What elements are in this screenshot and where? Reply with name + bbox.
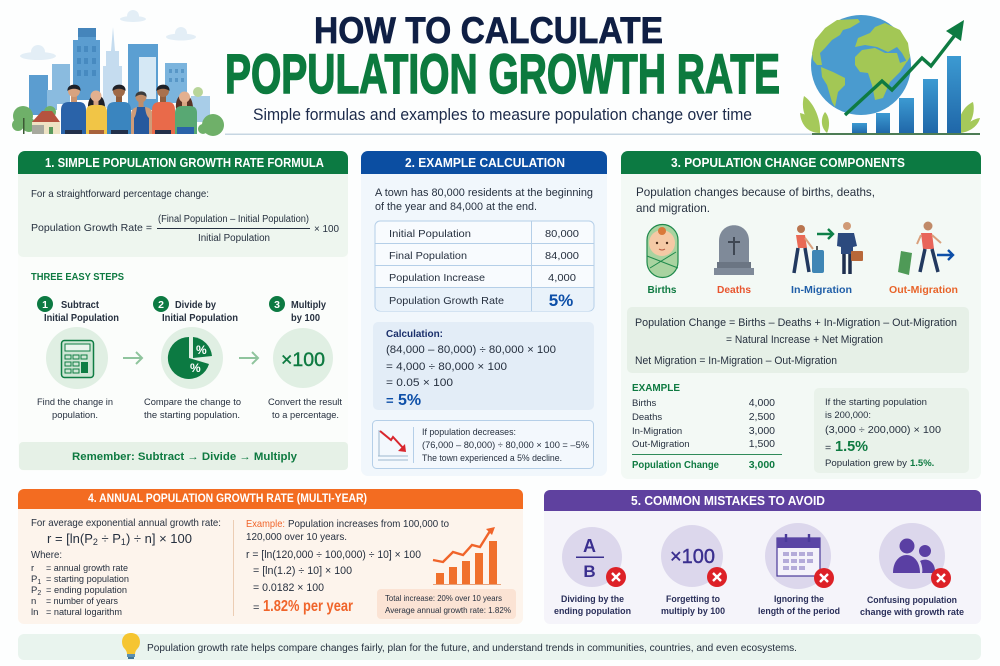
- three easy steps heading: THREE EASY STEPS: [31, 271, 124, 283]
- calculation box: [373, 322, 594, 410]
- panel 3 header: 3. POPULATION CHANGE COMPONENTS: [671, 156, 905, 170]
- annual formula and definitions: 2: [93, 537, 98, 547]
- step 1: [37, 296, 119, 421]
- panel 2 header: 2. EXAMPLE CALCULATION: [405, 155, 565, 170]
- step 2: Divide by: [175, 300, 216, 311]
- data table: 4,000: [548, 272, 576, 284]
- formula box: × 100: [314, 223, 339, 235]
- summary callout: Total increase: 20% over 10 years: [385, 593, 502, 603]
- worked example: Population increases from 100,000 to: [288, 518, 449, 530]
- step 1: Subtract: [61, 300, 100, 311]
- decline note: If population decreases:: [422, 427, 516, 437]
- mistake 1: B: [583, 562, 596, 581]
- step 2: Compare the change to: [144, 397, 241, 408]
- mistake 3: length of the period: [758, 606, 840, 617]
- example table: In-Migration: [632, 426, 682, 437]
- formula box: Population Change = Births – Deaths + In-Migration – Out-Migration: [635, 317, 957, 329]
- annual formula and definitions: = number of years: [46, 596, 118, 607]
- worked example: Example:: [246, 518, 285, 530]
- data table: Population Growth Rate: [389, 295, 504, 307]
- annual formula and definitions: Where:: [31, 549, 62, 561]
- icon: light bulb: [122, 633, 140, 659]
- worked example: = 0.0182 × 100: [253, 582, 324, 594]
- mistake 1: A: [583, 536, 596, 556]
- mistake 2: [661, 525, 727, 617]
- footer note: [18, 633, 981, 660]
- step 1: Initial Population: [44, 313, 119, 324]
- step 3: to a percentage.: [272, 410, 339, 421]
- icon: out-migration: Out-Migration: [889, 284, 958, 296]
- example table: EXAMPLE: [632, 382, 680, 394]
- calculation box: (84,000 – 80,000) ÷ 80,000 × 100: [386, 344, 556, 356]
- example table: 4,000: [749, 397, 775, 409]
- annual formula and definitions: 1: [121, 537, 126, 547]
- annual formula and definitions: r: [31, 563, 34, 574]
- step 1: Find the change in: [37, 397, 113, 408]
- step 2: Initial Population: [162, 313, 238, 324]
- result callout: Population grew by: [825, 458, 907, 469]
- data table: [375, 221, 594, 311]
- panel 1: simple formula: [18, 151, 348, 471]
- panel 2 header: [361, 151, 607, 174]
- icon: deaths: [714, 225, 754, 296]
- annual formula and definitions: = ending population: [46, 585, 127, 596]
- person 2: [86, 90, 107, 134]
- data table: 5%: [549, 291, 573, 310]
- annual formula and definitions: = natural logarithm: [46, 607, 122, 618]
- remember callout: [19, 442, 348, 470]
- mistake 1: ending population: [554, 606, 631, 617]
- title: POPULATION GROWTH RATE: [225, 42, 780, 105]
- example table: 3,000: [749, 425, 775, 437]
- step 3: Multiply: [291, 300, 326, 311]
- example table: Population Change: [632, 459, 719, 471]
- icon: out-migration: [889, 222, 958, 296]
- annual formula and definitions: ln: [31, 607, 38, 618]
- icon: calendar: [777, 534, 820, 576]
- step 1: population.: [52, 410, 98, 421]
- panel 1 header: 1. SIMPLE POPULATION GROWTH RATE FORMULA: [45, 156, 324, 170]
- example table: Deaths: [632, 412, 662, 423]
- formula box: Net Migration = In-Migration – Out-Migration: [635, 355, 837, 367]
- icon: births: [647, 224, 678, 296]
- worked example: [246, 518, 449, 615]
- panel 5: common mistakes: [544, 490, 981, 624]
- summary callout: Average annual growth rate: 1.82%: [385, 605, 511, 615]
- panel 1 header: [18, 151, 348, 174]
- result callout: is 200,000:: [825, 410, 871, 421]
- step 2: [144, 296, 241, 421]
- scenario text: of the year and 84,000 at the end.: [375, 201, 537, 213]
- formula box: (Final Population – Initial Population): [158, 214, 309, 225]
- header illustration: globe with growth bars and arrow: [800, 15, 980, 135]
- mistake 3: [758, 523, 840, 617]
- data table: Population Increase: [389, 272, 485, 284]
- mistake 4: change with growth rate: [860, 607, 964, 618]
- annual formula and definitions: r = [ln(P: [47, 531, 93, 546]
- icon: declining chart: [378, 430, 408, 460]
- mistake 1: [554, 527, 631, 617]
- calculation box: = 4,000 ÷ 80,000 × 100: [386, 361, 507, 373]
- panel 4 background: [18, 489, 523, 624]
- mistake 2: Forgetting to: [666, 594, 720, 605]
- annual formula and definitions: ) ÷ n] × 100: [126, 531, 192, 546]
- example table: 2,500: [749, 411, 775, 423]
- icon: percent pie: [168, 337, 212, 379]
- decline note: The town experienced a 5% decline.: [422, 453, 562, 463]
- mistake 2: multiply by 100: [661, 606, 725, 617]
- header illustration: city skyline and people: [12, 10, 224, 136]
- data table: 80,000: [545, 228, 579, 240]
- person 3: [107, 85, 131, 134]
- scenario text: A town has 80,000 residents at the beginning: [375, 187, 593, 199]
- formula box: [18, 170, 348, 257]
- step 2: 2: [158, 299, 164, 311]
- panel 4 header: [18, 489, 523, 509]
- panel 2: example calculation: [361, 151, 607, 476]
- annual formula and definitions: = starting population: [46, 574, 129, 585]
- result callout: 1.5%.: [910, 458, 934, 469]
- intro text: [636, 185, 875, 215]
- intro text: and migration.: [636, 201, 710, 215]
- step 3: by 100: [291, 313, 320, 324]
- icon: percent pie: %: [190, 361, 201, 375]
- formula box: Population Growth Rate =: [31, 222, 152, 234]
- example table: Births: [632, 398, 657, 409]
- icon: calculator: [62, 340, 94, 378]
- worked example: 120,000 over 10 years.: [246, 531, 347, 543]
- panel 3 background: [621, 151, 981, 479]
- annual formula and definitions: P: [31, 574, 37, 585]
- icon: times 100: ×100: [281, 350, 325, 371]
- formula box: [627, 307, 969, 373]
- icon: in-migration: [791, 222, 863, 296]
- mistake 2: ×100: [670, 546, 715, 568]
- summary callout: [377, 589, 516, 619]
- step 2: the starting population.: [144, 410, 240, 421]
- icon: percent pie: %: [196, 343, 207, 357]
- example table: 3,000: [749, 459, 775, 471]
- mistake 3: Ignoring the: [774, 594, 824, 605]
- result callout: [814, 388, 969, 473]
- icon: in-migration: In-Migration: [791, 284, 852, 296]
- arrow: step 1 to 2: [123, 352, 142, 364]
- calculation box: = 0.05 × 100: [386, 377, 453, 389]
- annual formula and definitions: ÷ P: [98, 531, 121, 546]
- panel 2 background: [361, 151, 607, 476]
- step 1: 1: [42, 299, 48, 311]
- data table: Initial Population: [389, 228, 471, 240]
- person 6: [175, 92, 197, 134]
- panel 3 header: [621, 151, 981, 174]
- person 1: [61, 85, 86, 134]
- scenario text: [375, 187, 593, 213]
- icon: people: [893, 538, 935, 573]
- person 4: [131, 91, 154, 134]
- worked example: r = [ln(120,000 ÷ 100,000) ÷ 10] × 100: [246, 549, 421, 561]
- decline note: [372, 420, 594, 468]
- title: HOW TO CALCULATE: [314, 10, 663, 51]
- step 3: [268, 296, 342, 421]
- panel 5 background: [544, 490, 981, 624]
- arrow: step 2 to 3: [239, 352, 258, 364]
- result callout: =: [825, 442, 831, 454]
- annual formula and definitions: P: [31, 585, 37, 596]
- title: [225, 10, 780, 105]
- formula box: For a straightforward percentage change:: [31, 188, 209, 200]
- panel 4 header: 4. ANNUAL POPULATION GROWTH RATE (MULTI-YEAR): [88, 491, 367, 505]
- result callout: (3,000 ÷ 200,000) × 100: [825, 424, 941, 436]
- calculation box: =: [386, 393, 394, 408]
- decline note: (76,000 – 80,000) ÷ 80,000 × 100 = –5%: [422, 440, 589, 450]
- step 3: Convert the result: [268, 397, 342, 408]
- mistake 4: [860, 523, 964, 618]
- worked example: = [ln(1.2) ÷ 10] × 100: [253, 565, 352, 577]
- annual formula and definitions: For average exponential annual growth rate:: [31, 517, 221, 529]
- worked example: =: [253, 602, 259, 614]
- annual formula and definitions: 2: [37, 590, 41, 597]
- step 3: 3: [274, 299, 280, 311]
- data table: Final Population: [389, 250, 467, 262]
- example table: [632, 382, 782, 471]
- result callout: If the starting population: [825, 397, 927, 408]
- mistake 1: Dividing by the: [561, 594, 624, 605]
- panel 4: annual growth rate: [18, 489, 523, 624]
- annual formula and definitions: n: [31, 596, 36, 607]
- calculation box: Calculation:: [386, 328, 443, 340]
- annual formula and definitions: 1: [37, 579, 41, 586]
- data table: 84,000: [545, 250, 579, 262]
- icon: deaths: Deaths: [717, 284, 751, 296]
- panel 3: population change components: [621, 151, 981, 479]
- annual formula and definitions: [31, 517, 221, 618]
- formula box: = Natural Increase + Net Migration: [726, 334, 883, 346]
- remember callout: Remember: Subtract → Divide → Multiply: [72, 451, 298, 463]
- orange growth chart: [433, 527, 501, 585]
- example table: 1,500: [749, 438, 775, 450]
- person 5: [152, 85, 175, 134]
- subtitle: Simple formulas and examples to measure population change over time: [253, 106, 752, 124]
- intro text: Population changes because of births, deaths,: [636, 185, 875, 199]
- worked example: 1.82% per year: [263, 598, 353, 615]
- formula box: Initial Population: [198, 233, 270, 244]
- mistake 4: Confusing population: [867, 595, 957, 606]
- result callout: 1.5%: [835, 439, 868, 455]
- icon: births: Births: [648, 284, 677, 296]
- panel 1 background: [18, 151, 348, 471]
- calculation box: 5%: [398, 392, 421, 409]
- panel 5 header: 5. COMMON MISTAKES TO AVOID: [631, 493, 825, 508]
- footer note: Population growth rate helps compare changes fairly, plan for the future, and understand trends in communities, countries, and even ecosystems.: [147, 642, 797, 654]
- panel 5 header: [544, 490, 981, 511]
- annual formula and definitions: = annual growth rate: [46, 563, 128, 574]
- example table: Out-Migration: [632, 439, 690, 450]
